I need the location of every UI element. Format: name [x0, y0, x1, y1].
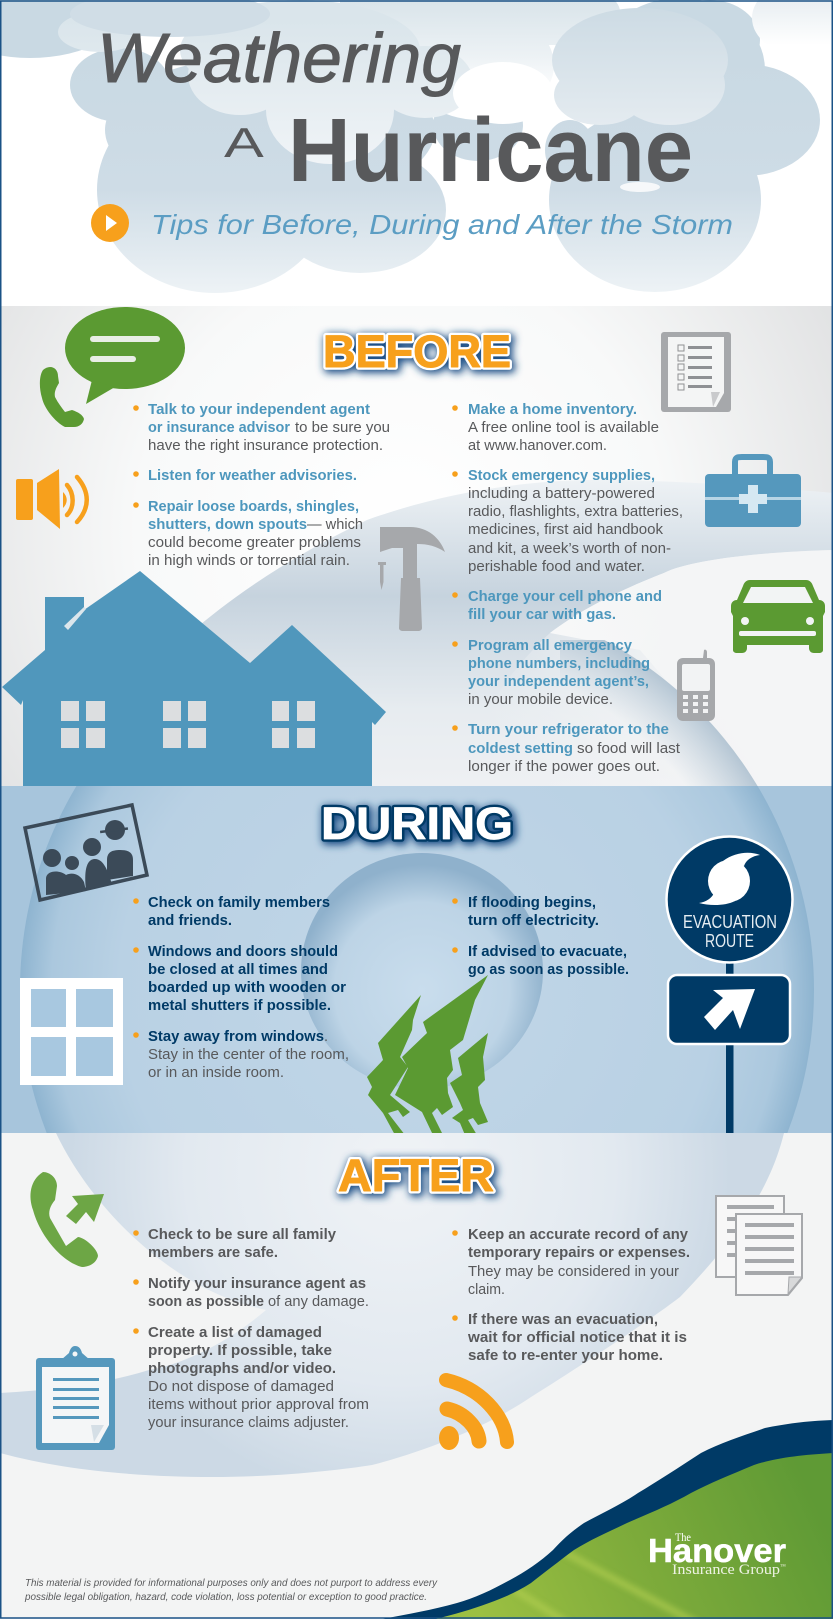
- text: before right column: so food will last: [577, 741, 680, 757]
- text: after left column: soon as possible: [148, 1294, 264, 1310]
- text: before left column: Talk to your independent agent: [148, 402, 370, 418]
- text: before right column: your independent agent’s,: [468, 674, 649, 690]
- text: during left column: .: [324, 1029, 328, 1045]
- title: [97, 19, 693, 201]
- icon: documents: [716, 1196, 802, 1295]
- text: after left column: Do not dispose of damaged: [148, 1379, 334, 1395]
- disclaimer: possible legal obligation, hazard, code violation, loss potential or exception to good practice.: [24, 1591, 427, 1603]
- text: before right column: perishable food and water.: [468, 559, 645, 575]
- title: A: [224, 119, 264, 166]
- header clouds: [0, 0, 833, 293]
- text: before left column: — which: [307, 517, 363, 533]
- icon: phone with arrow: [30, 1172, 104, 1267]
- text: after left column: your insurance claims adjuster.: [148, 1415, 349, 1431]
- text: during right column: [452, 895, 629, 978]
- panel: before: [2, 306, 832, 786]
- heading: before: BEFORE: [323, 326, 511, 377]
- text: after left column: Create a list of damaged: [148, 1325, 322, 1341]
- logo: ™: [780, 1564, 786, 1570]
- logo: Hanover: [648, 1532, 786, 1569]
- text: during left column: and friends.: [148, 913, 232, 929]
- text: before right column: Stock emergency supplies,: [468, 468, 655, 484]
- text: before right column: Turn your refrigerator to the: [468, 722, 669, 738]
- heading: before: BEFORE: [325, 328, 513, 379]
- text: before left column: have the right insurance protection.: [148, 438, 383, 454]
- panel: during: [2, 786, 832, 1133]
- logo: Insurance Group: [672, 1562, 780, 1578]
- text: before right column: in your mobile device.: [468, 692, 613, 708]
- text: during left column: metal shutters if possible.: [148, 998, 331, 1014]
- footer swoosh: [383, 1420, 833, 1619]
- text: before right column: at www.hanover.com.: [468, 438, 607, 454]
- icon: checklist: [661, 332, 731, 412]
- heading: during: DURING: [321, 798, 513, 849]
- text: during left column: [133, 895, 349, 1081]
- text: before right column: Program all emergency: [468, 638, 632, 654]
- subtitle with play icon: [91, 204, 733, 242]
- text: during right column: turn off electricity.: [468, 913, 599, 929]
- text: after right column: claim.: [468, 1282, 505, 1298]
- text: during left column: Stay away from windows: [148, 1029, 324, 1045]
- text: during left column: be closed at all times and: [148, 962, 328, 978]
- text: during left column: Check on family members: [148, 895, 330, 911]
- icon: window: [20, 978, 123, 1085]
- text: after left column: [133, 1227, 369, 1431]
- disclaimer: This material is provided for informational purposes only and does not purport to address every: [25, 1577, 438, 1589]
- text: after right column: They may be considered in your: [468, 1264, 679, 1280]
- icon: rss signal: [439, 1380, 507, 1450]
- title: Weathering: [97, 19, 461, 97]
- heading: after: AFTER: [338, 1150, 494, 1201]
- text: before right column: [452, 402, 683, 775]
- text: before right column: medicines, first aid handbook: [468, 522, 664, 538]
- text: after right column: temporary repairs or expenses.: [468, 1245, 690, 1261]
- text: during left column: Windows and doors should: [148, 944, 338, 960]
- text: after left column: of any damage.: [268, 1294, 369, 1310]
- icon: evacuation route sign: ROUTE: [705, 931, 754, 951]
- icon: house: [2, 571, 386, 786]
- icon: hammer and nail: [378, 527, 445, 631]
- text: before left column: or insurance advisor: [148, 420, 290, 436]
- text: before right column: longer if the power goes out.: [468, 759, 660, 775]
- text: after left column: members are safe.: [148, 1245, 278, 1261]
- text: before right column: Make a home inventory.: [468, 402, 637, 418]
- text: during left column: Stay in the center of the room,: [148, 1047, 349, 1063]
- text: before right column: radio, flashlights, extra batteries,: [468, 504, 683, 520]
- text: before left column: [133, 402, 390, 569]
- heading: during: DURING: [323, 800, 515, 851]
- logo: The: [675, 1530, 691, 1544]
- text: during right column: If advised to evacuate,: [468, 944, 627, 960]
- text: after left column: items without prior approval from: [148, 1397, 369, 1413]
- text: after right column: If there was an evacuation,: [468, 1312, 658, 1328]
- text: before right column: coldest setting: [468, 741, 573, 757]
- text: before right column: phone numbers, including: [468, 656, 650, 672]
- icon: clipboard: [36, 1346, 115, 1450]
- subtitle with play icon: Tips for Before, During and After the Storm: [151, 209, 733, 240]
- text: after left column: Check to be sure all family: [148, 1227, 336, 1243]
- text: before right column: including a battery-powered: [468, 486, 655, 502]
- icon: evacuation route sign: [666, 836, 792, 1133]
- text: before right column: and kit, a week’s worth of non-: [468, 541, 671, 557]
- icon: family photo: [25, 805, 147, 900]
- text: during right column: If flooding begins,: [468, 895, 596, 911]
- disclaimer: [24, 1577, 438, 1603]
- text: before right column: A free online tool is available: [468, 420, 659, 436]
- icon: first aid kit: [705, 457, 801, 527]
- heading: after: AFTER: [338, 1150, 494, 1201]
- text: during left column: or in an inside room.: [148, 1065, 284, 1081]
- text: before left column: in high winds or torrential rain.: [148, 553, 350, 569]
- text: after left column: photographs and/or video.: [148, 1361, 336, 1377]
- text: before left column: to be sure you: [295, 420, 390, 436]
- title: Hurricane: [288, 101, 693, 201]
- text: after right column: wait for official notice that it is: [467, 1330, 687, 1346]
- text: before left column: could become greater problems: [148, 535, 361, 551]
- icon: bent trees: [367, 975, 488, 1135]
- panel: after: [0, 1133, 833, 1619]
- heading: after: AFTER: [340, 1152, 496, 1203]
- text: before right column: fill your car with gas.: [468, 607, 616, 623]
- heading: before: BEFORE: [323, 326, 511, 377]
- text: during right column: go as soon as possible.: [468, 962, 629, 978]
- icon: car: [731, 580, 825, 653]
- icon: speaker: [16, 469, 87, 529]
- text: after left column: Notify your insurance agent as: [148, 1276, 366, 1292]
- text: before left column: Listen for weather advisories.: [148, 468, 357, 484]
- text: after right column: safe to re-enter your home.: [468, 1348, 663, 1364]
- heading: during: DURING: [321, 798, 513, 849]
- text: before left column: Repair loose boards, shingles,: [148, 499, 359, 515]
- icon: evacuation route sign: EVACUATION: [683, 912, 777, 932]
- text: during left column: boarded up with wooden or: [148, 980, 346, 996]
- text: after left column: property. If possible, take: [148, 1343, 332, 1359]
- text: before right column: Charge your cell phone and: [468, 589, 662, 605]
- text: after right column: Keep an accurate record of any: [468, 1227, 688, 1243]
- text: before left column: shutters, down spouts: [148, 517, 307, 533]
- icon: speech bubble and phone: [40, 307, 185, 427]
- text: after right column: [452, 1227, 690, 1364]
- icon: mobile phone: [677, 650, 715, 721]
